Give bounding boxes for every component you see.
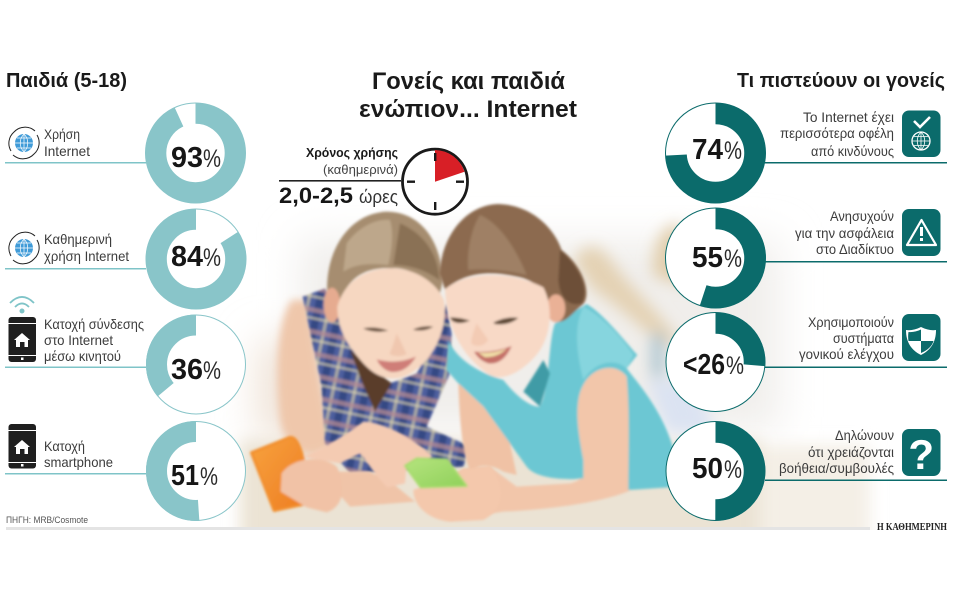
heading: parents: Τι πιστεύουν οι γονείς bbox=[737, 70, 945, 92]
label bbox=[44, 126, 90, 159]
donut 93%: % bbox=[203, 145, 221, 173]
icon: warning triangle bbox=[902, 209, 940, 256]
label: βοήθεια/συμβουλές bbox=[779, 460, 894, 476]
donut 50%: % bbox=[724, 456, 742, 484]
carpet bbox=[240, 440, 760, 550]
label: Internet bbox=[44, 143, 90, 159]
left girl arm bbox=[277, 300, 333, 455]
row: parental control systems bbox=[666, 312, 947, 412]
usage time block: Χρόνος χρήσης bbox=[306, 145, 398, 160]
label: Καθημερινή bbox=[44, 231, 112, 247]
left girl ear bbox=[324, 288, 340, 322]
left girl plaid shirt bbox=[303, 288, 470, 473]
usage time block bbox=[279, 145, 401, 208]
donut 36% bbox=[146, 315, 246, 414]
label: Δηλώνουν bbox=[835, 427, 894, 443]
lower forearm bbox=[338, 472, 415, 507]
donut 51%: 51 bbox=[171, 460, 199, 492]
row: mobile internet bbox=[5, 297, 246, 414]
icon: shield bbox=[902, 314, 940, 361]
label: στο Internet bbox=[44, 332, 113, 348]
bottom rule bbox=[6, 527, 870, 530]
row: need help and advice bbox=[666, 422, 947, 520]
donut 74%: % bbox=[724, 137, 742, 165]
publisher logo: Η ΚΑΘΗΜΕΡΙΝΗ bbox=[877, 522, 947, 533]
label: στο Διαδίκτυο bbox=[816, 241, 894, 257]
usage time block: ώρες bbox=[359, 187, 398, 207]
orange phone bbox=[251, 437, 306, 511]
right girl ear bbox=[547, 294, 565, 322]
label: Κατοχή σύνδεσης bbox=[44, 316, 144, 332]
donut 84%: % bbox=[203, 244, 221, 272]
icon: phone with home bbox=[8, 424, 36, 468]
label: γονικού ελέγχου bbox=[799, 346, 894, 362]
label bbox=[44, 231, 129, 264]
icon: globe bbox=[9, 127, 39, 159]
label: από κινδύνους bbox=[811, 143, 894, 159]
donut 55% bbox=[666, 208, 766, 308]
row: internet use bbox=[5, 103, 246, 203]
donut 50%: 50 bbox=[692, 453, 723, 485]
donut 26% bbox=[666, 312, 765, 412]
label: ότι χρειάζονται bbox=[808, 444, 894, 460]
donut 50% bbox=[666, 422, 765, 520]
donut 93%: 93 bbox=[171, 142, 203, 174]
green phone bbox=[405, 458, 467, 487]
label bbox=[44, 316, 144, 364]
donut 84% bbox=[146, 209, 246, 309]
right girl face bbox=[445, 275, 550, 377]
icon: wifi bbox=[10, 297, 34, 313]
label: Κατοχή bbox=[44, 438, 85, 454]
donut 51% bbox=[146, 422, 246, 520]
donut 84%: 84 bbox=[171, 241, 203, 273]
label bbox=[780, 109, 894, 159]
icon: phone with home bbox=[8, 317, 36, 362]
row: smartphone ownership bbox=[5, 422, 246, 520]
label: Ανησυχούν bbox=[830, 208, 894, 224]
label: περισσότερα οφέλη bbox=[780, 125, 894, 141]
label bbox=[44, 438, 113, 470]
title: Γονείς και παιδιά bbox=[372, 68, 565, 95]
icon: check and globe bbox=[902, 110, 940, 157]
donut 74%: 74 bbox=[692, 134, 723, 166]
photo backdrop bbox=[258, 240, 780, 440]
hand holding green phone bbox=[413, 467, 501, 522]
right girl near arm bbox=[458, 383, 517, 475]
label: χρήση Internet bbox=[44, 248, 129, 264]
icon: globe bbox=[9, 232, 39, 264]
donut 74% bbox=[666, 103, 766, 203]
donut 36%: 36 bbox=[171, 354, 203, 386]
label: συστήματα bbox=[833, 330, 894, 346]
usage time block: 2,0-2,5 bbox=[279, 183, 353, 208]
left girl neckline bbox=[350, 350, 392, 412]
donut 26%: <26 bbox=[683, 349, 725, 381]
label: smartphone bbox=[44, 454, 113, 470]
icon: clock bbox=[402, 149, 468, 214]
left girl face bbox=[337, 268, 445, 379]
row: daily internet use bbox=[5, 209, 246, 309]
icon: question mark bbox=[902, 429, 940, 478]
donut 55%: 55 bbox=[692, 242, 723, 274]
pointing hand bbox=[303, 422, 433, 487]
label: Χρησιμοποιούν bbox=[808, 314, 894, 330]
label bbox=[779, 427, 894, 476]
row: more benefits than risks bbox=[666, 103, 947, 203]
panel: parents bbox=[666, 103, 947, 520]
title: ενώπιον... Internet bbox=[359, 96, 577, 123]
right girl far arm bbox=[420, 368, 630, 520]
donut 51%: % bbox=[200, 463, 218, 491]
right girl turquoise shirt bbox=[447, 304, 680, 490]
blurred legs in the background bbox=[573, 223, 717, 433]
label: Χρήση bbox=[44, 126, 80, 142]
photo: two girls with smartphones on carpet bbox=[240, 204, 870, 550]
white area below the photo bbox=[200, 530, 900, 570]
donut 55%: % bbox=[724, 245, 742, 273]
label bbox=[799, 314, 894, 362]
label bbox=[795, 208, 894, 257]
left girl hair bbox=[327, 212, 443, 307]
panel: children bbox=[5, 103, 246, 520]
label: μέσω κινητού bbox=[44, 348, 121, 364]
donut 93% bbox=[146, 103, 246, 203]
right girl hair bbox=[439, 204, 587, 322]
row: worried about safety bbox=[666, 208, 947, 308]
donut 26%: % bbox=[726, 352, 744, 380]
donut 36%: % bbox=[203, 357, 221, 385]
carpet right fade bbox=[720, 445, 870, 545]
heading: children: Παιδιά (5-18) bbox=[6, 70, 127, 92]
source: ΠΗΓΗ: MRB/Cosmote bbox=[6, 515, 88, 525]
icon: question mark: ? bbox=[908, 431, 934, 478]
title bbox=[359, 68, 577, 123]
hand holding orange phone bbox=[281, 459, 342, 512]
usage time block: (καθημερινά) bbox=[323, 162, 398, 177]
label: για την ασφάλεια bbox=[795, 225, 894, 241]
label: Το Internet έχει bbox=[803, 109, 894, 125]
